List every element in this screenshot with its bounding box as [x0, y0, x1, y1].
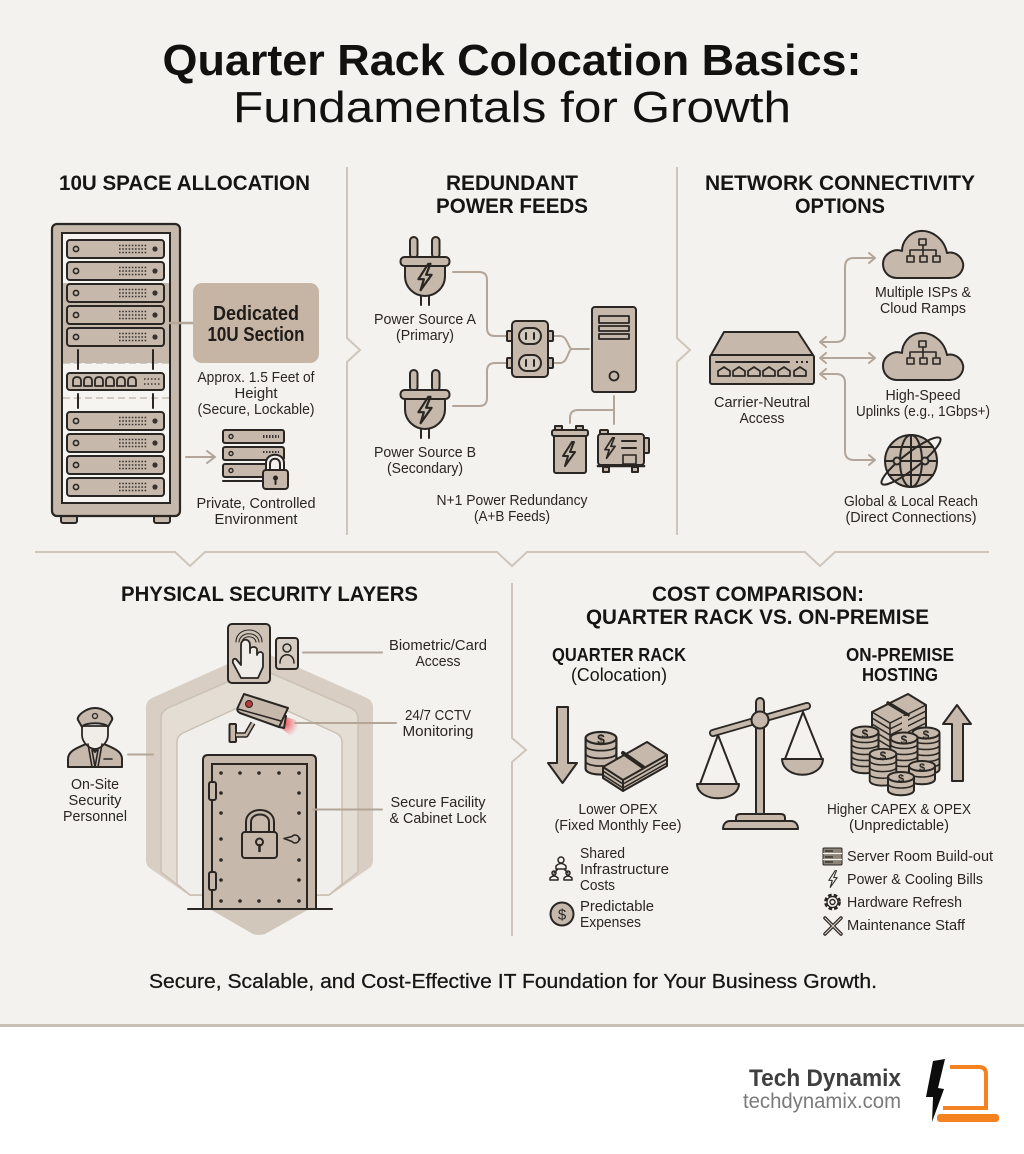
subheading: on-premise: HOSTING: [862, 665, 938, 685]
text: predictable: [580, 899, 654, 931]
subheading: quarter rack: [552, 645, 686, 685]
icon: security guard: [68, 708, 122, 767]
label: source B: [374, 445, 476, 477]
text: private environment: Private, Controlled: [196, 496, 316, 512]
title: Quarter Rack Colocation Basics:: [162, 36, 862, 85]
heading: physical security layers: PHYSICAL SECURITY LAYERS: [121, 583, 418, 606]
icon: CCTV camera: [230, 694, 299, 742]
heading: 10U space allocation: 10U SPACE ALLOCATION: [59, 172, 310, 195]
label: source A: Power Source A: [374, 312, 476, 328]
text: predictable: Predictable: [580, 899, 654, 915]
text: height note: [198, 370, 315, 418]
label: secure facility: Secure Facility: [390, 795, 486, 811]
text: shared infrastructure: [580, 846, 669, 894]
heading: network connectivity options: NETWORK CONNECTIVITY: [705, 172, 975, 195]
icon: down arrow: [548, 707, 577, 783]
logo: bolt and laptop: [926, 1059, 999, 1122]
icon: access card: [276, 638, 298, 669]
label: CCTV: [402, 708, 474, 740]
text: higher capex: [827, 802, 971, 834]
icon: money pile: $: [901, 733, 908, 747]
label: biometric: Access: [416, 654, 460, 670]
label: source A: (Primary): [396, 328, 454, 344]
heading: redundant power feeds: POWER FEEDS: [436, 195, 588, 218]
icon: generator: [598, 430, 649, 472]
text: shared infrastructure: Infrastructure: [580, 862, 669, 878]
label: CCTV: Monitoring: [402, 724, 474, 740]
icon: cloud ISPs: [883, 231, 963, 278]
icon: plug B: [400, 370, 450, 438]
label: security personnel: Personnel: [63, 809, 127, 825]
panel: redundant power feeds: [374, 172, 649, 525]
icon: gear: [826, 895, 839, 909]
callout: dedicated 10U section: Dedicated: [213, 303, 299, 325]
text: hardware refresh: Hardware Refresh: [847, 895, 962, 911]
icon: network switch: [710, 332, 814, 384]
heading: redundant power feeds: [436, 172, 588, 218]
text: shared infrastructure: Shared: [580, 846, 625, 862]
icon: money pile: $: [862, 727, 869, 741]
label: CCTV: 24/7 CCTV: [405, 708, 471, 724]
label: ISPs: Multiple ISPs &: [875, 285, 971, 301]
panel: network connectivity: [705, 172, 990, 526]
icon: shared people: [550, 857, 572, 880]
icon: dual outlet: [507, 321, 553, 377]
label: global reach: [844, 494, 978, 526]
security layers shield: [146, 650, 373, 935]
icon: money pile: [852, 694, 940, 795]
icon: globe: [877, 432, 945, 490]
text: private environment: Environment: [214, 512, 298, 528]
subheading: on-premise: [846, 645, 954, 685]
label: global reach: Global & Local Reach: [844, 494, 978, 510]
panel: physical security layers: [63, 583, 487, 935]
heading: cost comparison: [586, 583, 929, 629]
text: maintenance: Maintenance Staff: [847, 918, 966, 934]
text: height note: (Secure, Lockable): [198, 402, 314, 418]
text: shared infrastructure: Costs: [580, 878, 615, 894]
connector arrows: [820, 253, 875, 465]
tagline: Secure, Scalable, and Cost-Effective IT Foundation for Your Business Growth.: [149, 971, 877, 993]
subheading: quarter rack: (Colocation): [571, 665, 667, 685]
label: source B: (Secondary): [387, 461, 463, 477]
heading: cost comparison: QUARTER RACK VS. ON-PREMISE: [586, 606, 929, 629]
icon: server room: [823, 848, 842, 865]
text: lower opex: Lower OPEX: [578, 802, 658, 818]
text: height note: Height: [234, 386, 278, 402]
callout: dedicated 10U section: [193, 283, 319, 363]
brand name: Tech Dynamix: [749, 1065, 902, 1092]
panel: cost comparison: [548, 583, 993, 934]
text: higher capex: (Unpredictable): [849, 818, 949, 834]
icon: dollar circle: $: [558, 906, 567, 924]
heading: redundant power feeds: REDUNDANT: [446, 172, 578, 195]
label: carrier-neutral: Carrier-Neutral: [714, 395, 810, 411]
icon: cloud uplinks: [883, 333, 963, 380]
subheading: quarter rack: QUARTER RACK: [552, 645, 686, 665]
label: secure facility: & Cabinet Lock: [390, 811, 487, 827]
panel: 10U space allocation: [52, 172, 319, 528]
label: uplinks: Uplinks (e.g., 1Gbps+): [856, 404, 990, 420]
icon: coins and cash: $: [597, 731, 605, 747]
icon: up arrow: [943, 705, 971, 781]
icon: money pile: $: [880, 749, 887, 763]
text: higher capex: Higher CAPEX & OPEX: [827, 802, 971, 818]
label: ISPs: Cloud Ramps: [880, 301, 966, 317]
text: lower opex: (Fixed Monthly Fee): [554, 818, 682, 834]
text: redundancy note: (A+B Feeds): [474, 509, 550, 525]
label: uplinks: High-Speed: [886, 388, 960, 404]
heading: network connectivity options: [705, 172, 975, 218]
label: ISPs: [875, 285, 971, 317]
icon: bolt: [829, 871, 837, 887]
icon: plug A: [400, 237, 450, 305]
title: Fundamentals for Growth: [233, 83, 791, 132]
label: uplinks: [856, 388, 990, 420]
text: redundancy note: N+1 Power Redundancy: [436, 493, 588, 509]
icon: money pile: $: [923, 728, 930, 742]
label: security personnel: [63, 777, 127, 825]
label: source A: [374, 312, 476, 344]
label: biometric: Biometric/Card: [389, 638, 487, 654]
label: biometric: [389, 638, 487, 670]
label: security personnel: On-Site: [71, 777, 119, 793]
icon: server rack: [52, 224, 180, 523]
label: security personnel: Security: [68, 793, 122, 809]
text: lower opex: [554, 802, 682, 834]
icon: coins and cash: [586, 731, 667, 791]
text: predictable: Expenses: [580, 915, 641, 931]
icon: dollar circle: [550, 902, 574, 926]
brand url: techdynamix.com: [743, 1090, 901, 1113]
heading: cost comparison: COST COMPARISON:: [652, 583, 864, 606]
icon: tools: [825, 918, 841, 934]
icon: biometric reader: [228, 624, 270, 683]
arrow: [186, 451, 215, 463]
footer: [0, 1024, 1024, 1154]
label: carrier-neutral: [714, 395, 810, 427]
text: private environment: [196, 496, 316, 528]
icon: security door: [188, 755, 332, 909]
label: global reach: (Direct Connections): [846, 510, 976, 526]
icon: server tower: [592, 307, 636, 392]
heading: network connectivity options: OPTIONS: [795, 195, 885, 218]
icon: balance scale: [697, 698, 823, 829]
subheading: on-premise: ON-PREMISE: [846, 645, 954, 665]
text: redundancy note: [436, 493, 588, 525]
icon: money pile: $: [919, 762, 925, 774]
feed wires: [453, 272, 614, 424]
label: secure facility: [390, 795, 487, 827]
label: carrier-neutral: Access: [740, 411, 784, 427]
icon: locked servers: [223, 430, 288, 489]
text: height note: Approx. 1.5 Feet of: [198, 370, 315, 386]
text: power cooling: Power & Cooling Bills: [847, 872, 983, 888]
icon: money pile: $: [898, 773, 904, 785]
icon: battery: [552, 426, 588, 473]
callout: dedicated 10U section: 10U Section: [208, 324, 304, 346]
label: source B: Power Source B: [374, 445, 476, 461]
text: server room: Server Room Build-out: [847, 849, 993, 865]
title: [162, 36, 862, 132]
